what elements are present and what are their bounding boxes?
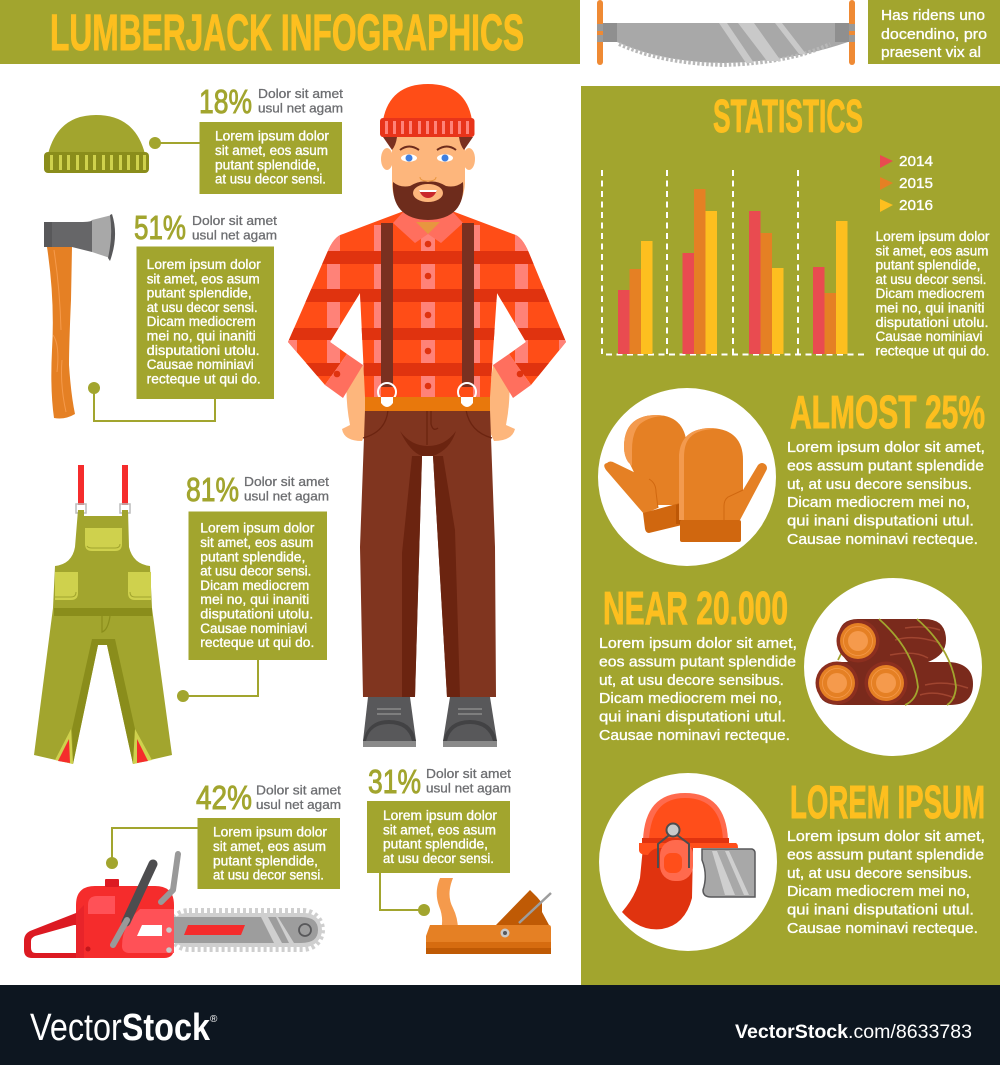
text block: helmet: qui inani disputationi utul. (787, 903, 974, 919)
callout: 51%: 51% (134, 209, 186, 246)
text block: helmet: Causae nominavi recteque. (787, 921, 978, 937)
callout: 31%: sit amet, eos asum (383, 822, 496, 837)
callout: 51%: recteque ut qui do. (147, 371, 261, 386)
text block: gloves: ut, at usu decore sensibus. (787, 477, 972, 493)
top right text box: Has ridens uno (881, 8, 985, 24)
callout: 31%: Dolor sit amet (426, 766, 511, 781)
panel: statistics (581, 86, 1000, 985)
callout: 31%: at usu decor sensi. (383, 851, 494, 866)
callout: 81% (177, 471, 329, 702)
callout: 42%: putant splendide, (213, 853, 318, 868)
registered mark: ® (210, 1014, 218, 1025)
text block: gloves: Lorem ipsum dolor sit amet, (787, 440, 985, 456)
icon: two-man saw (597, 0, 855, 65)
text block: gloves: Causae nominavi recteque. (787, 532, 978, 548)
callout: 51%: at usu decor sensi. (147, 300, 258, 315)
legend: 2014 (899, 154, 933, 170)
callout: 51%: sit amet, eos asum (147, 271, 260, 286)
bar chart (602, 170, 865, 354)
callout: 42%: Lorem ipsum dolor (213, 825, 328, 840)
lumberjack hat (380, 84, 474, 137)
statistics text: sit amet, eos asum (876, 243, 988, 258)
callout: 42% (106, 779, 341, 889)
callout: 81%: putant splendide, (200, 549, 305, 564)
callout: 51%: mei no, qui inaniti (147, 328, 256, 344)
suspenders and belt (365, 223, 490, 411)
legend: 2015 (899, 176, 933, 192)
boots (363, 697, 497, 747)
callout: 18%: Dolor sit amet (258, 86, 343, 101)
callout: 81%: disputationi utolu. (200, 606, 313, 622)
text block: gloves: Dicam mediocrem mei no, (787, 495, 970, 511)
statistics text: disputationi utolu. (876, 315, 988, 330)
callout: 81%: at usu decor sensi. (200, 564, 311, 579)
icon: forestry helmet (599, 773, 777, 951)
callout: 81%: sit amet, eos asum (200, 535, 313, 550)
callout: 42%: 42% (196, 779, 252, 816)
icon: wood plane (426, 878, 551, 954)
callout: 51%: Causae nominiavi (147, 357, 254, 372)
text block: helmet: ut, at usu decore sensibus. (787, 866, 972, 882)
callout: 31%: usul net agam (426, 780, 511, 796)
callout: 18% (149, 83, 343, 194)
callout: 81%: Causae nominiavi (200, 621, 307, 636)
callout: 42%: sit amet, eos asum (213, 839, 326, 854)
statistics text: mei no, qui inaniti (876, 300, 984, 316)
footer logo: VectorStock (30, 1007, 211, 1049)
text block: logs: Lorem ipsum dolor sit amet, (599, 636, 797, 652)
callout: 81%: mei no, qui inaniti (200, 592, 309, 607)
statistics text: Dicam mediocrem (876, 286, 984, 301)
statistics text: at usu decor sensi. (876, 272, 986, 287)
text block: logs (599, 636, 797, 744)
callout: 18%: Lorem ipsum dolor (215, 129, 330, 144)
callout: 31%: putant splendide, (383, 837, 488, 852)
callout: 18%: at usu decor sensi. (215, 172, 326, 187)
text block: gloves: eos assum putant splendide (787, 458, 984, 474)
top right text box (868, 0, 1000, 64)
statistics text: Causae nominiavi (876, 329, 982, 344)
text block: gloves: qui inani disputationi utul. (787, 514, 974, 530)
callout: 18%: putant splendide, (215, 157, 320, 172)
text block: logs: eos assum putant splendide (599, 654, 796, 670)
text block: helmet (787, 829, 985, 937)
callout: 51% (88, 209, 277, 421)
plaid shirt (280, 211, 576, 398)
callout: 51%: usul net agam (192, 227, 277, 242)
callout: 42%: at usu decor sensi. (213, 868, 324, 883)
text block: logs: qui inani disputationi utul. (599, 710, 786, 726)
callout: 18%: usul net agam (258, 100, 343, 116)
hands (342, 365, 515, 441)
callout: 31% (367, 763, 511, 916)
callout: 81%: Dolor sit amet (244, 474, 329, 489)
callout: 42%: Dolor sit amet (256, 782, 341, 798)
callout: 51%: disputationi utolu. (147, 343, 260, 358)
callout: 81%: usul net agam (244, 488, 329, 504)
statistics text: putant splendide, (876, 258, 980, 273)
title banner (0, 0, 580, 64)
callout: 42%: usul net agam (256, 797, 341, 812)
text block: helmet: Lorem ipsum dolor sit amet, (787, 829, 985, 845)
top right text box: docendino, pro (881, 27, 987, 43)
title banner: LUMBERJACK INFOGRAPHICS (50, 4, 524, 61)
icon: overalls (34, 465, 172, 764)
statistics text: Lorem ipsum dolor (876, 229, 990, 244)
callout: 18%: sit amet, eos asum (215, 143, 328, 158)
callout: 31%: Lorem ipsum dolor (383, 808, 498, 823)
callout: 18%: 18% (199, 83, 252, 120)
icon: beanie (44, 115, 149, 173)
text block: helmet: Dicam mediocrem mei no, (787, 884, 970, 900)
legend: 2016 (899, 198, 933, 214)
callout: 81%: 81% (186, 471, 239, 508)
icon: mittens (598, 388, 776, 566)
figure: lumberjack (280, 84, 576, 747)
icon: logs (804, 578, 982, 756)
legend (880, 154, 933, 214)
text block: gloves (787, 440, 985, 548)
head (381, 135, 475, 220)
footer (0, 985, 1000, 1065)
callout: 51%: putant splendide, (147, 286, 252, 301)
icon: axe (44, 214, 115, 418)
trousers (360, 410, 496, 697)
heading: statistics: STATISTICS (713, 90, 863, 142)
callout: 81%: recteque ut qui do. (200, 635, 314, 650)
footer url: VectorStock.com/8633783 (735, 1022, 972, 1043)
text block: logs: ut, at usu decore sensibus. (599, 673, 784, 689)
icon: chainsaw (24, 854, 322, 958)
callout: 51%: Dolor sit amet (192, 213, 277, 228)
text block: logs: Causae nominavi recteque. (599, 728, 790, 744)
heading: near 20.000: NEAR 20.000 (603, 582, 788, 634)
callout: 51%: Dicam mediocrem (147, 314, 256, 329)
statistics text (876, 229, 990, 358)
text block: helmet: eos assum putant splendide (787, 847, 984, 863)
callout: 81%: Dicam mediocrem (200, 578, 309, 593)
callout: 31%: 31% (368, 763, 421, 800)
top right text box: praesent vix al (881, 45, 981, 61)
callout: 81%: Lorem ipsum dolor (200, 521, 315, 536)
statistics text: recteque ut qui do. (876, 343, 990, 358)
text block: logs: Dicam mediocrem mei no, (599, 691, 782, 707)
callout: 51%: Lorem ipsum dolor (147, 257, 261, 272)
